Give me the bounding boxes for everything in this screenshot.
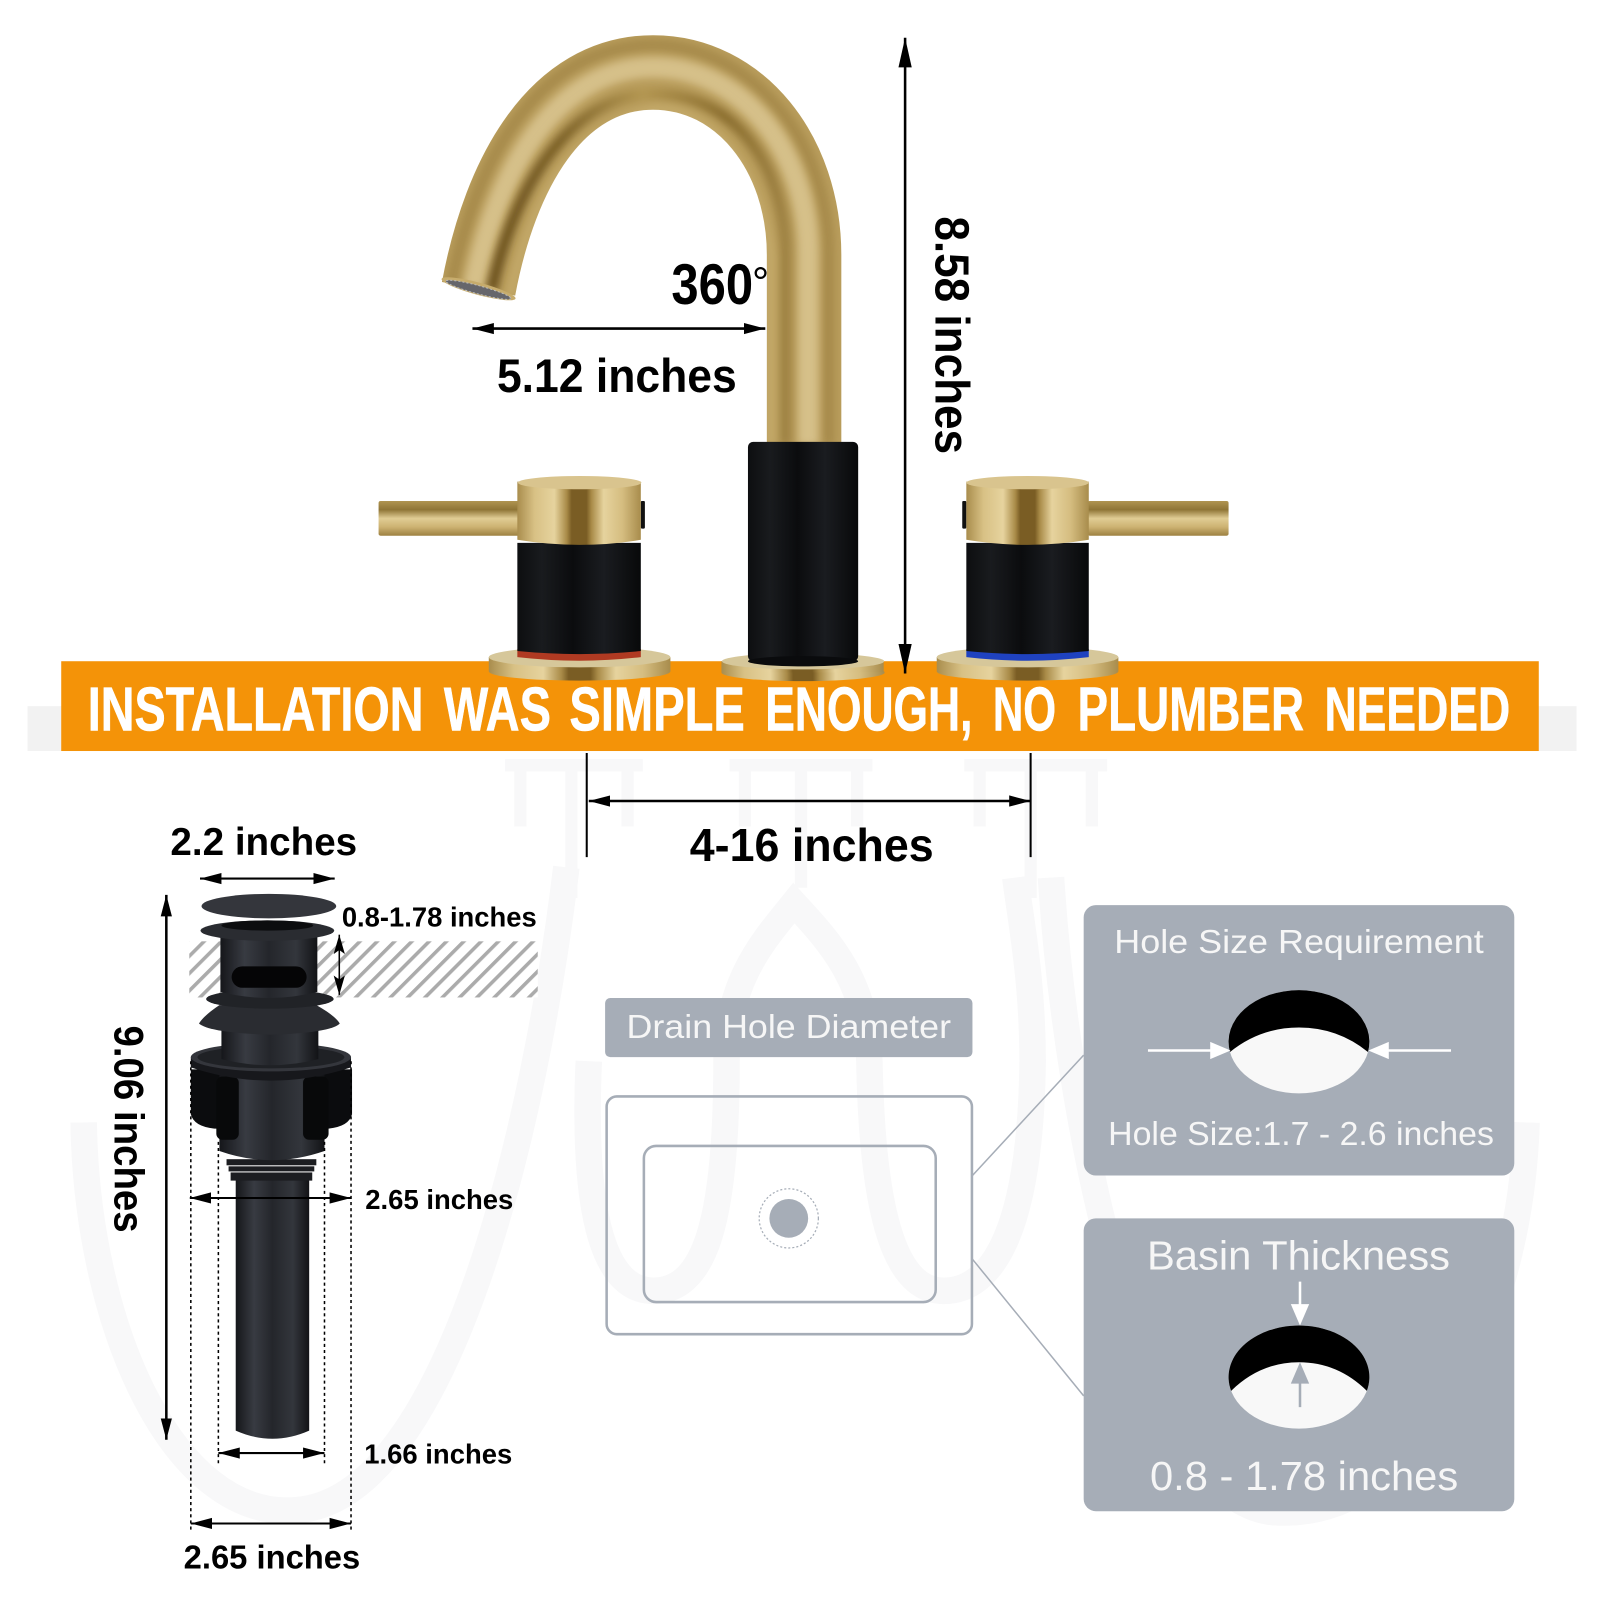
panel: hole size requirement (1084, 905, 1514, 1176)
label: 4-16 inches: 4-16 inches (690, 819, 934, 871)
drain lower flange (206, 989, 334, 1009)
hatched basin section (189, 941, 538, 997)
basin diagram (607, 1055, 1084, 1396)
panel: basin thickness (1084, 1218, 1514, 1511)
thickness value: 0.8 - 1.78 inches (1150, 1453, 1458, 1499)
drain dimension lines (166, 879, 351, 1532)
drain thread (227, 1159, 316, 1181)
right handle (937, 476, 1229, 681)
big flange (191, 1057, 351, 1081)
pale band behind banner (28, 706, 1577, 751)
label: 360 degrees: 360 (671, 253, 753, 317)
pop-up drain (191, 894, 352, 1439)
banner: installation message: WAS (444, 676, 551, 745)
label: 2.2 inches: 2.2 inches (170, 821, 357, 864)
hole icon (1148, 990, 1451, 1093)
drain pipe (236, 1173, 309, 1439)
dimension: handle spread (587, 753, 1031, 857)
drain neck (221, 1029, 318, 1065)
drain body (220, 937, 317, 998)
drain side tabs (216, 1077, 329, 1140)
banner: installation message: SIMPLE (569, 676, 745, 745)
arrow: spout reach (472, 327, 765, 330)
drain lower body (219, 1071, 324, 1160)
label: 1.66 inches: 1.66 inches (364, 1438, 512, 1469)
thickness icon (1229, 1282, 1369, 1429)
label: 8.58 inches: 8.58 inches (925, 216, 978, 454)
spout (442, 35, 842, 442)
ghost hoses background (84, 765, 1527, 1512)
heading: Hole Size Requirement (1114, 924, 1484, 961)
label: 9.06 inches: 9.06 inches (105, 1026, 152, 1233)
arrow: faucet height (904, 38, 906, 673)
label: 2.65 inches bottom: 2.65 inches (184, 1539, 360, 1576)
degree mark: ° (752, 259, 769, 307)
label: 5.12 inches: 5.12 inches (497, 350, 737, 402)
drain slot (232, 966, 307, 988)
drain cap (202, 894, 336, 918)
hole size value: Hole Size:1.7 - 2.6 inches (1108, 1116, 1494, 1153)
heading: Basin Thickness (1147, 1232, 1450, 1278)
faucet (379, 0, 1229, 681)
aerator (440, 273, 517, 305)
banner: installation message: PLUMBER (1078, 676, 1304, 745)
panel: drain hole diameter heading (605, 998, 972, 1057)
banner: installation message: NO (993, 676, 1056, 745)
left handle (379, 476, 670, 681)
drain lobes (191, 1069, 352, 1129)
banner: installation message: ENOUGH, (765, 676, 972, 745)
panel: drain hole diameter heading: Drain Hole Diameter (627, 1009, 951, 1046)
drain upper flange (201, 920, 334, 941)
centre riser (721, 442, 885, 681)
drain collar cone (199, 1005, 340, 1035)
label: 2.65 inches side: 2.65 inches (365, 1184, 513, 1215)
label: 0.8-1.78 inches: 0.8-1.78 inches (342, 902, 537, 933)
banner: installation message (61, 661, 1539, 751)
banner: installation message: NEEDED (1324, 676, 1510, 745)
banner: installation message: INSTALLATION (88, 676, 423, 745)
